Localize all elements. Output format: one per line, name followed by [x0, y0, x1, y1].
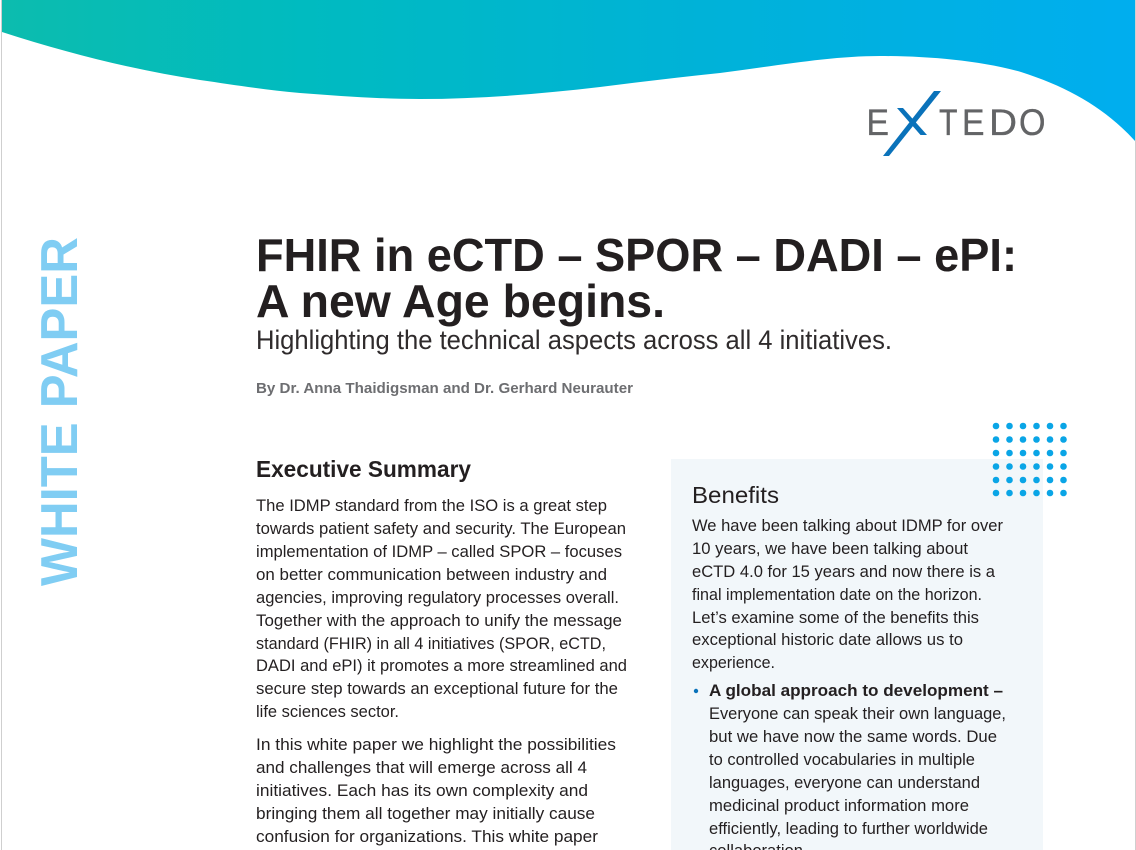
- text block: benefits intro: Let’s examine some of the benefits this: [692, 608, 979, 627]
- text block: summary paragraph 2: In this white paper we highlight the possibilities: [256, 735, 616, 754]
- bullet item: a global approach: A global approach to development –: [709, 681, 1003, 700]
- text block: summary paragraph 1: implementation of IDMP – called SPOR – focuses: [256, 542, 622, 561]
- bullet item: a global approach: to controlled vocabularies in multiple: [709, 750, 975, 769]
- subtitle: Highlighting the technical aspects across all 4 initiatives.: [256, 325, 892, 355]
- text block: summary paragraph 1: The IDMP standard from the ISO is a great step: [256, 496, 607, 515]
- vertical label: WHITE PAPER: WHITE PAPER: [30, 237, 88, 586]
- bullet item: a global approach: [694, 681, 1006, 850]
- decorative dot grid icon: [993, 423, 1067, 496]
- bullet item: a global approach: but we have now the same words. Due: [709, 727, 997, 746]
- text block: summary paragraph 2: initiatives. Each has its own complexity and: [256, 781, 588, 800]
- text block: summary paragraph 2: and challenges that will emerge across all 4: [256, 758, 587, 777]
- logo: EXTEDO: D: [989, 101, 1017, 143]
- text block: summary paragraph 2: confusion for organizations. This white paper: [256, 827, 598, 846]
- authors: By Dr. Anna Thaidigsman and Dr. Gerhard Neurauter: [256, 380, 633, 397]
- logo: EXTEDO: O: [1019, 101, 1046, 143]
- text block: benefits intro: 10 years, we have been talking about: [692, 539, 968, 558]
- text block: benefits intro: exceptional historic date allows us to: [692, 630, 963, 649]
- logo: EXTEDO: T: [939, 101, 958, 143]
- text block: summary paragraph 1: Together with the approach to unify the message: [256, 611, 622, 630]
- title: FHIR in eCTD – SPOR – DADI – ePI:: [256, 229, 1017, 281]
- text block: benefits intro: eCTD 4.0 for 15 years and now there is a: [692, 562, 996, 581]
- bullet item: a global approach: medicinal product information more: [709, 796, 969, 815]
- text block: summary paragraph 1: standard (FHIR) in all 4 initiatives (SPOR, eCTD,: [256, 634, 606, 653]
- panel: benefits background: [671, 459, 1043, 850]
- logo: EXTEDO: E: [962, 101, 984, 143]
- logo: EXTEDO: [866, 91, 1046, 156]
- text block: summary paragraph 1: secure step towards an exceptional future for the: [256, 679, 618, 698]
- text block: benefits intro: We have been talking about IDMP for over: [692, 516, 1003, 535]
- bullet item: a global approach: languages, everyone can understand: [709, 773, 980, 792]
- text block: summary paragraph 2: [256, 735, 616, 846]
- bullet item: a global approach: Everyone can speak their own language,: [709, 704, 1006, 723]
- title: [256, 229, 1017, 327]
- text block: benefits intro: final implementation date on the horizon.: [692, 585, 982, 604]
- text block: summary paragraph 1: towards patient safety and security. The European: [256, 519, 626, 538]
- text block: benefits intro: experience.: [692, 653, 775, 672]
- header wave: [2, 0, 1135, 141]
- text block: summary paragraph 1: on better communication between industry and: [256, 565, 607, 584]
- text block: summary paragraph 1: agencies, improving regulatory processes overall.: [256, 588, 619, 607]
- text block: summary paragraph 2: bringing them all together may initially cause: [256, 804, 595, 823]
- heading: Benefits: Benefits: [692, 482, 779, 508]
- text block: summary paragraph 1: DADI and ePI) it promotes a more streamlined and: [256, 656, 627, 675]
- heading: Executive Summary: Executive Summary: [256, 456, 471, 482]
- bullet item: a global approach: efficiently, leading to further worldwide: [709, 819, 988, 838]
- text block: summary paragraph 1: life sciences sector.: [256, 702, 399, 721]
- logo: EXTEDO: E: [866, 101, 889, 143]
- text block: benefits intro: [692, 516, 1003, 672]
- text block: summary paragraph 1: [256, 496, 627, 721]
- title: A new Age begins.: [256, 275, 665, 327]
